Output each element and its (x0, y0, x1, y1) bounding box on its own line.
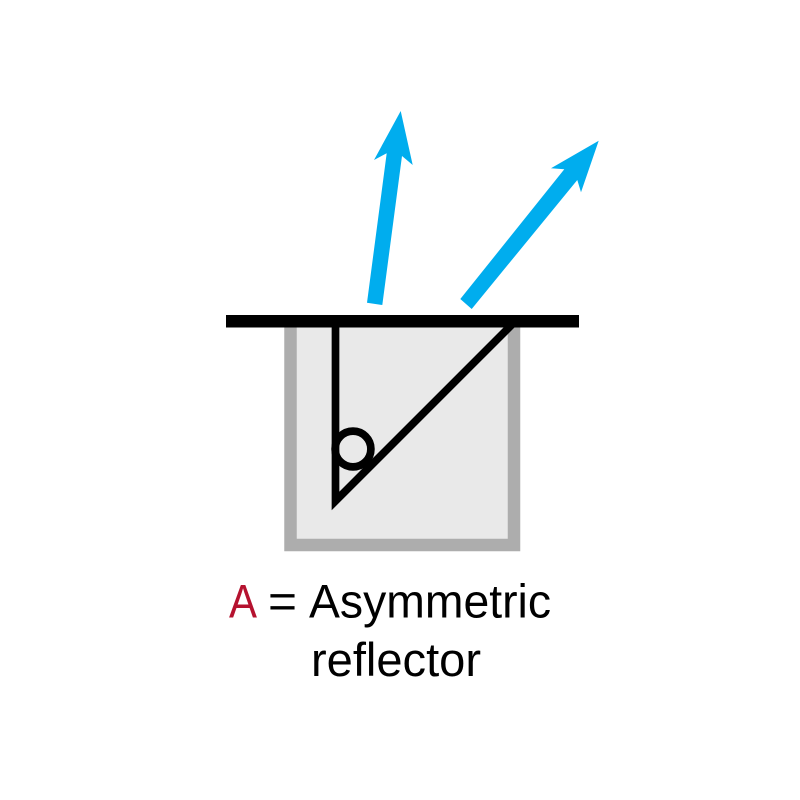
caption: = (268, 575, 297, 628)
caption: A (229, 575, 258, 628)
asymmetric reflector triangle (336, 321, 516, 501)
caption: reflector (311, 633, 481, 686)
arrow: light ray diagonal (460, 141, 599, 309)
arrow: light ray upward (367, 111, 413, 305)
top black surface bar (226, 315, 579, 328)
caption (229, 575, 551, 686)
light bulb circle (335, 431, 371, 467)
reflector housing (290, 321, 514, 545)
caption: Asymmetric (309, 575, 551, 628)
